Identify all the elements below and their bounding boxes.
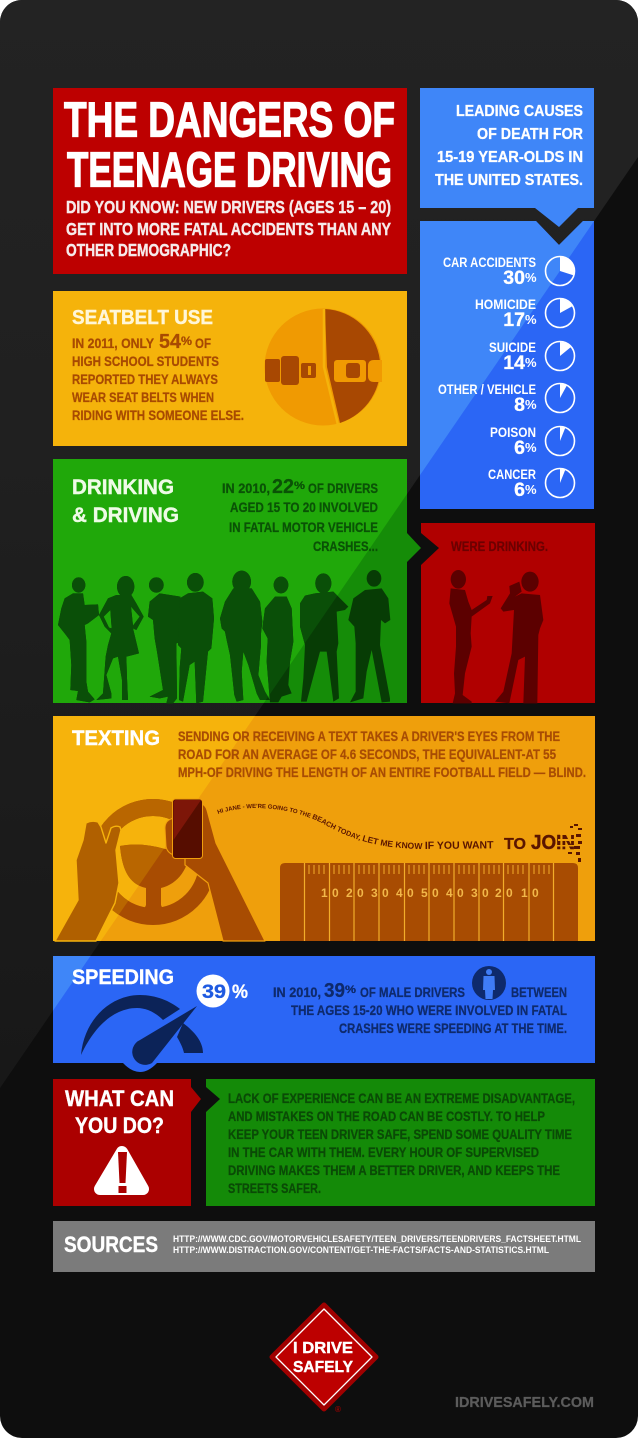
row: cancer: 6 (514, 479, 525, 501)
advice text: DRIVING MAKES THEM A BETTER DRIVER, AND KEEPS THE (228, 1163, 560, 1178)
row: car accidents: CAR ACCIDENTS (443, 255, 536, 270)
speedometer gauge (81, 995, 203, 1065)
football field: 0 (332, 886, 339, 900)
panel: causes of death list (420, 221, 594, 509)
football field: 2 (495, 886, 502, 900)
speeding text: OF MALE DRIVERS (360, 985, 465, 1000)
heading: & DRIVING (72, 504, 179, 527)
drinking text: % (294, 480, 305, 492)
heading: TEENAGE DRIVING (67, 144, 392, 198)
row: homicide: HOMICIDE (475, 297, 536, 312)
speeding text: THE AGES 15-20 WHO WERE INVOLVED IN FATAL (291, 1003, 567, 1018)
website: IDRIVESAFELY.COM (455, 1394, 594, 1411)
football field: 0 (482, 886, 489, 900)
football field (280, 863, 578, 941)
heading: THE DANGERS OF (64, 94, 395, 148)
row: other vehicle: % (525, 397, 537, 412)
football field: 0 (432, 886, 439, 900)
panel: speeding (53, 956, 595, 1072)
seatbelt text: 54 (159, 331, 182, 353)
drinking text (222, 476, 378, 554)
panel: leading causes callout (420, 88, 594, 227)
curved text message: HI JANE - WE'RE GOING TO THE BEACH TODAY, LET ME KNOW IF YOU WANT (217, 804, 494, 849)
heading (64, 94, 395, 198)
callout text: LEADING CAUSES (456, 103, 583, 120)
seatbelt text: REPORTED THEY ALWAYS (72, 372, 218, 387)
intro text: GET INTO MORE FATAL ACCIDENTS THAN ANY (66, 219, 391, 239)
football field: 3 (471, 886, 478, 900)
football field: 0 (506, 886, 513, 900)
source urls: HTTP://WWW.DISTRACTION.GOV/CONTENT/GET-THE-FACTS/FACTS-AND-STATISTICS.HTML (173, 1245, 549, 1256)
row: homicide (475, 297, 574, 331)
heading: SOURCES (64, 1232, 158, 1257)
football field: 3 (371, 886, 378, 900)
39 percent badge: 39 (202, 982, 226, 1003)
football field: 2 (346, 886, 353, 900)
intro text: OTHER DEMOGRAPHIC? (66, 240, 231, 260)
row: other vehicle: 8 (514, 394, 525, 416)
panel: texting (53, 716, 595, 942)
panel: advice (206, 1079, 595, 1206)
football field: 5 (421, 886, 428, 900)
intro text: DID YOU KNOW: NEW DRIVERS (AGES 15 – 20) (66, 197, 391, 217)
advice text: IN THE CAR WITH THEM. EVERY HOUR OF SUPERVISED (228, 1145, 539, 1160)
label: WERE DRINKING. (451, 539, 548, 554)
speeding text (273, 980, 567, 1036)
seatbelt text: HIGH SCHOOL STUDENTS (72, 354, 219, 369)
silhouettes: two drinkers (449, 570, 543, 703)
callout text (435, 103, 583, 189)
row: poison: POISON (490, 425, 536, 440)
row: poison (490, 425, 574, 459)
curved text message (217, 804, 582, 862)
heading (65, 1086, 174, 1138)
heading: DRINKING (72, 476, 174, 499)
drinking text: IN 2010, (222, 481, 270, 496)
logo: i drive safely: SAFELY (293, 1359, 353, 1376)
phone (172, 799, 202, 858)
advice text: AND MISTAKES ON THE ROAD CAN BE COSTLY. TO HELP (228, 1109, 545, 1124)
pie chart with seatbelt icon (264, 308, 382, 426)
drinking text: AGED 15 TO 20 INVOLVED (230, 500, 378, 515)
row: other vehicle (438, 382, 574, 416)
seatbelt text: OF (195, 336, 211, 351)
panel: seatbelt use (53, 291, 407, 446)
football field: 0 (382, 886, 389, 900)
football field: 0 (357, 886, 364, 900)
panel: were drinking (421, 523, 595, 703)
callout text: THE UNITED STATES. (435, 172, 583, 189)
football field: 1 (321, 886, 328, 900)
callout text: 15-19 YEAR-OLDS IN (437, 149, 583, 166)
panel: title (53, 88, 407, 274)
row: suicide (489, 340, 574, 374)
football field: 0 (457, 886, 464, 900)
row: cancer: CANCER (488, 467, 536, 482)
heading: YOU DO? (75, 1113, 164, 1138)
speeding text: CRASHES WERE SPEEDING AT THE TIME. (339, 1021, 567, 1036)
football field: 4 (446, 886, 453, 900)
texting text (178, 729, 586, 780)
seatbelt text: % (181, 334, 192, 348)
right hand and arm (185, 804, 265, 941)
logo: i drive safely (272, 1305, 376, 1414)
advice text: LACK OF EXPERIENCE CAN BE AN EXTREME DISADVANTAGE, (228, 1091, 575, 1106)
heading: TEXTING (72, 727, 160, 750)
speeding text: 39 (324, 980, 345, 1002)
row: suicide: SUICIDE (489, 340, 536, 355)
icon: male figure (472, 966, 506, 1000)
curved text message: TO (504, 836, 526, 853)
row: homicide: 17 (503, 309, 525, 331)
texting text: SENDING OR RECEIVING A TEXT TAKES A DRIVER'S EYES FROM THE (178, 729, 560, 744)
seatbelt text: RIDING WITH SOMEONE ELSE. (72, 408, 244, 423)
row: poison: % (525, 440, 537, 455)
39 percent badge: % (232, 982, 248, 1003)
speeding text: IN 2010, (273, 985, 321, 1000)
heading (72, 476, 179, 527)
row: cancer (488, 467, 574, 501)
row: car accidents: % (525, 270, 537, 285)
row: suicide: 14 (503, 352, 525, 374)
row: car accidents: 30 (503, 267, 525, 289)
seatbelt text: IN 2011, ONLY (72, 336, 154, 351)
drinking text: IN FATAL MOTOR VEHICLE (229, 520, 378, 535)
heading: WHAT CAN (65, 1086, 174, 1111)
row: cancer: % (525, 482, 537, 497)
row: other vehicle: OTHER / VEHICLE (438, 382, 536, 397)
row: car accidents (443, 255, 574, 289)
advice text: KEEP YOUR TEEN DRIVER SAFE, SPEND SOME QUALITY TIME (228, 1127, 572, 1142)
speeding text: % (345, 984, 356, 996)
speeding text: BETWEEN (511, 985, 567, 1000)
heading: SPEEDING (72, 966, 174, 989)
football field: 4 (396, 886, 403, 900)
panel: sources (53, 1221, 595, 1272)
callout text: OF DEATH FOR (477, 126, 583, 143)
panel: what can you do (53, 1079, 201, 1206)
curved text message: JOIN (531, 832, 575, 854)
left hand (55, 821, 121, 941)
football field: 1 (521, 886, 528, 900)
advice text (228, 1091, 575, 1196)
drinking text: OF DRIVERS (308, 481, 378, 496)
advice text: STREETS SAFER. (228, 1181, 321, 1196)
intro text (66, 197, 391, 260)
football field: 0 (407, 886, 414, 900)
silhouettes: eight teens (58, 570, 390, 703)
source urls (173, 1234, 581, 1256)
heading: SEATBELT USE (72, 307, 213, 329)
drinking text: CRASHES... (313, 539, 378, 554)
source urls: HTTP://WWW.CDC.GOV/MOTORVEHICLESAFETY/TEEN_DRIVERS/TEENDRIVERS_FACTSHEET.HTML (173, 1234, 581, 1245)
39 percent badge (196, 974, 248, 1008)
row: poison: 6 (514, 437, 525, 459)
steering wheel (98, 808, 208, 916)
logo: i drive safely: I DRIVE (293, 1340, 353, 1357)
fingers behind phone (165, 818, 174, 855)
logo: i drive safely: ® (335, 1405, 341, 1414)
icon: warning triangle (100, 1152, 143, 1193)
row: suicide: % (525, 355, 537, 370)
panel: drinking and driving (53, 459, 421, 703)
football field: 0 (532, 886, 539, 900)
seatbelt text (72, 331, 244, 423)
seatbelt text: WEAR SEAT BELTS WHEN (72, 390, 214, 405)
texting text: ROAD FOR AN AVERAGE OF 4.6 SECONDS, THE EQUIVALENT-AT 55 (178, 747, 556, 762)
row: homicide: % (525, 312, 537, 327)
drinking text: 22 (272, 476, 294, 498)
